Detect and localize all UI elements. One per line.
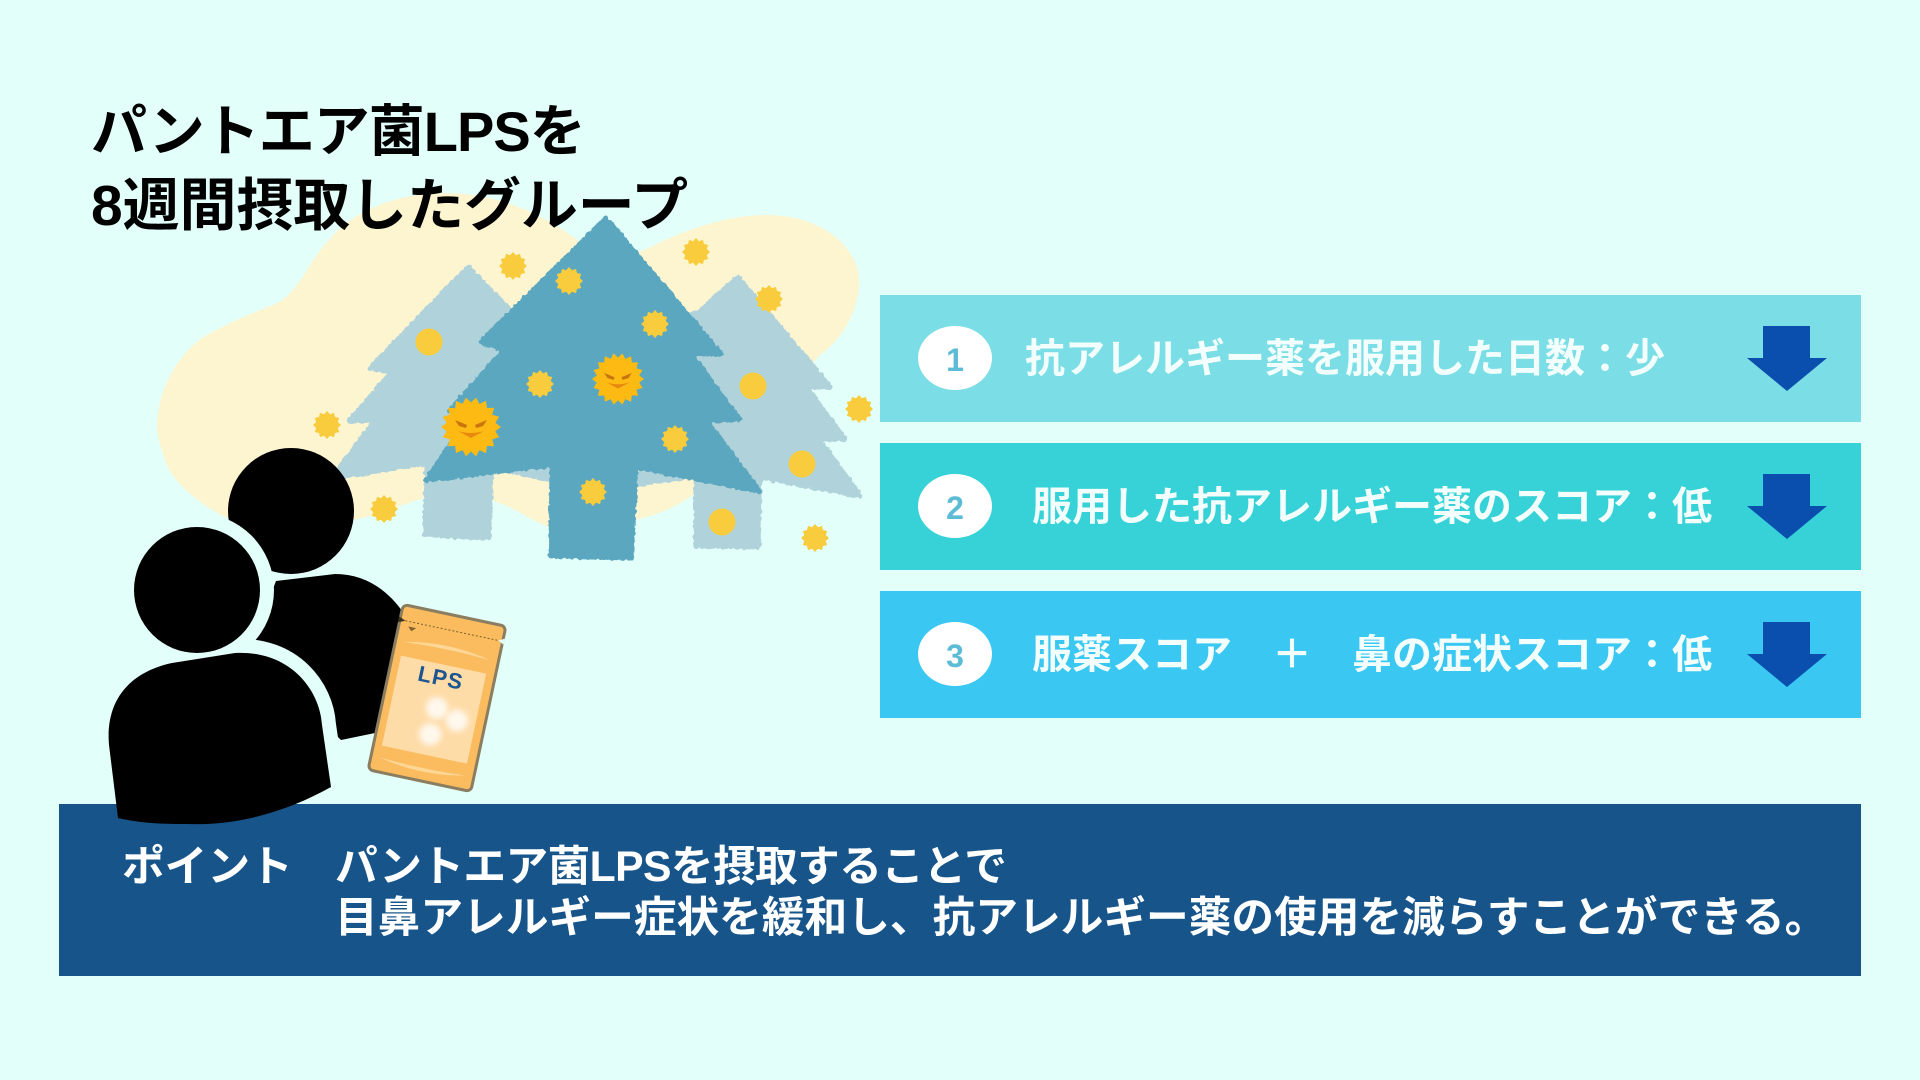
pollen particles [313,238,873,552]
tree: centre [426,218,759,558]
icon: pollen face large [441,398,501,456]
badge 1 [918,326,992,390]
badge 3 [918,622,992,686]
icon: pollen face small [592,353,644,405]
badge 2: 2 [946,490,964,526]
panel: key point banner [59,804,1861,976]
person: back [228,448,408,740]
tree: right [638,277,860,547]
panel: result 2 [880,443,1861,570]
result 3 text right: 鼻の症状スコア：低 [1352,633,1712,677]
result 2 text: 服用した抗アレルギー薬のスコア：低 [1032,485,1712,529]
title line 1: パントエア菌LPSを [91,100,585,163]
title line 2: 8週間摂取したグループ [91,174,688,238]
arrow down 1 [1747,326,1827,391]
badge 2 [918,474,992,538]
badge 3: 3 [946,638,964,674]
tree: left [332,267,570,538]
result 3 text left: 服薬スコア [1032,633,1232,677]
badge 1: 1 [946,342,964,378]
arrow down 2 [1747,474,1827,539]
point text line 2: 目鼻アレルギー症状を緩和し、抗アレルギー薬の使用を減らすことができる。 [335,894,1827,942]
LPS supplement packet [367,604,507,792]
panel: result 1 [880,295,1861,422]
background blob [157,193,859,531]
panel: result 3 [880,591,1861,718]
arrow down 3 [1747,622,1827,687]
label: point: ポイント [122,843,293,891]
result 1 text: 抗アレルギー薬を服用した日数：少 [1025,337,1665,381]
packet label: LPS [416,661,466,695]
plus sign: ＋ [1272,633,1312,677]
person: front [109,513,331,824]
point text line 1: パントエア菌LPSを摂取することで [335,843,1006,891]
title [91,100,688,238]
